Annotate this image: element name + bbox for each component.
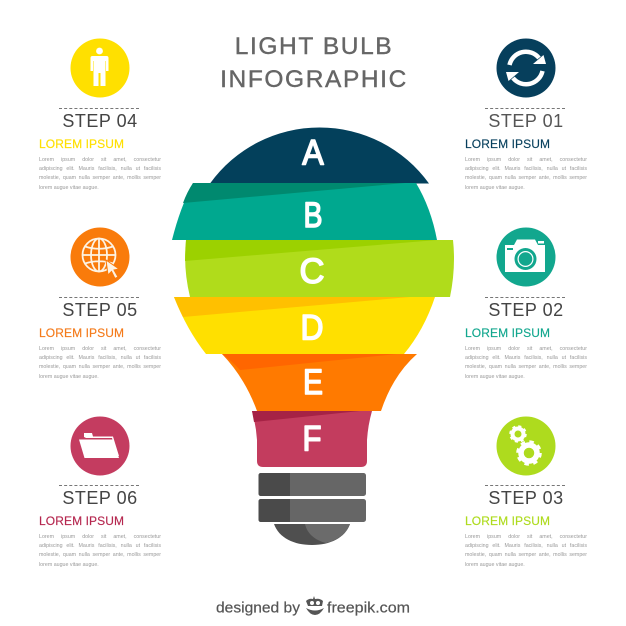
text: step 04 — [39, 157, 161, 191]
text: step 03 — [465, 534, 587, 568]
step 01 panel: STEP 01 — [488, 111, 564, 131]
step 06 panel: STEP 06 — [62, 488, 138, 508]
band A: A — [302, 134, 324, 172]
step 03 panel — [465, 416, 587, 568]
text: step 02: Lorem ipsum dolor sit amet, consectetur — [465, 346, 587, 352]
band A — [210, 127, 429, 184]
text: step 03: adipiscing elit. Mauris facilisis, nulla ut facilisis — [465, 543, 587, 549]
title: LIGHT BULB — [235, 32, 393, 60]
bulb screw base — [258, 473, 366, 545]
step 05 panel — [39, 228, 161, 380]
text: step 01: molestie, quam nulla semper ante, mollis semper — [465, 175, 587, 181]
text: step 02 — [465, 346, 587, 380]
heading: step 04: LOREM IPSUM — [39, 137, 124, 151]
title — [220, 32, 408, 92]
icon: folder — [70, 416, 130, 476]
text: step 01: Lorem ipsum dolor sit amet, consectetur — [465, 157, 587, 163]
text: step 01: lorem augue vitae augue. — [465, 185, 525, 191]
text: step 02: adipiscing elit. Mauris facilisis, nulla ut facilisis — [465, 355, 587, 361]
step 03 panel: STEP 03 — [488, 488, 564, 508]
step 06 panel — [39, 416, 161, 568]
text: step 06 — [39, 534, 161, 568]
text: step 05: molestie, quam nulla semper ante, mollis semper — [39, 364, 161, 370]
text: step 06: Lorem ipsum dolor sit amet, consectetur — [39, 534, 161, 540]
footer credit: designed by — [216, 600, 301, 616]
title: INFOGRAPHIC — [220, 66, 408, 92]
band F: F — [302, 420, 322, 458]
text: step 01: adipiscing elit. Mauris facilisis, nulla ut facilisis — [465, 166, 587, 172]
band D: D — [300, 308, 324, 348]
text: step 04: Lorem ipsum dolor sit amet, consectetur — [39, 157, 161, 163]
text: step 05: lorem augue vitae augue. — [39, 374, 99, 380]
text: step 03: lorem augue vitae augue. — [465, 562, 525, 568]
text: step 06: adipiscing elit. Mauris facilisis, nulla ut facilisis — [39, 543, 161, 549]
text: step 05 — [39, 346, 161, 380]
footer credit: freepik.com — [327, 600, 410, 616]
step 04 panel: STEP 04 — [62, 111, 138, 131]
band C: C — [300, 252, 324, 291]
text: step 03: Lorem ipsum dolor sit amet, consectetur — [465, 534, 587, 540]
band D — [174, 297, 435, 354]
step 04 panel — [39, 38, 161, 191]
band E: E — [303, 363, 323, 402]
icon: camera — [496, 228, 556, 286]
icon: gears — [496, 416, 556, 476]
text: step 05: adipiscing elit. Mauris facilisis, nulla ut facilisis — [39, 355, 161, 361]
step 05 panel: STEP 05 — [62, 300, 138, 320]
step 02 panel — [465, 228, 587, 380]
icon: globe with cursor — [70, 228, 130, 286]
text: step 03: molestie, quam nulla semper ante, mollis semper — [465, 552, 587, 558]
band C — [185, 240, 454, 297]
text: step 04: lorem augue vitae augue. — [39, 185, 99, 191]
footer credit — [216, 596, 410, 616]
band E — [222, 354, 417, 411]
heading: step 03: LOREM IPSUM — [465, 514, 550, 528]
icon: person — [70, 38, 130, 98]
icon: freepik mascot — [306, 596, 324, 615]
heading: step 06: LOREM IPSUM — [39, 514, 124, 528]
band B: B — [304, 196, 322, 235]
text: step 04: adipiscing elit. Mauris facilisis, nulla ut facilisis — [39, 166, 161, 172]
text: step 01 — [465, 157, 587, 191]
icon: sync arrows — [496, 38, 556, 98]
text: step 05: Lorem ipsum dolor sit amet, consectetur — [39, 346, 161, 352]
heading: step 02: LOREM IPSUM — [465, 326, 550, 340]
text: step 02: molestie, quam nulla semper ante, mollis semper — [465, 364, 587, 370]
heading: step 05: LOREM IPSUM — [39, 326, 124, 340]
text: step 04: molestie, quam nulla semper ante, mollis semper — [39, 175, 161, 181]
band F — [252, 411, 372, 467]
text: step 06: molestie, quam nulla semper ante, mollis semper — [39, 552, 161, 558]
step 02 panel: STEP 02 — [488, 300, 564, 320]
step 01 panel — [465, 38, 587, 191]
text: step 06: lorem augue vitae augue. — [39, 562, 99, 568]
band B — [172, 183, 437, 240]
text: step 02: lorem augue vitae augue. — [465, 374, 525, 380]
heading: step 01: LOREM IPSUM — [465, 137, 550, 151]
